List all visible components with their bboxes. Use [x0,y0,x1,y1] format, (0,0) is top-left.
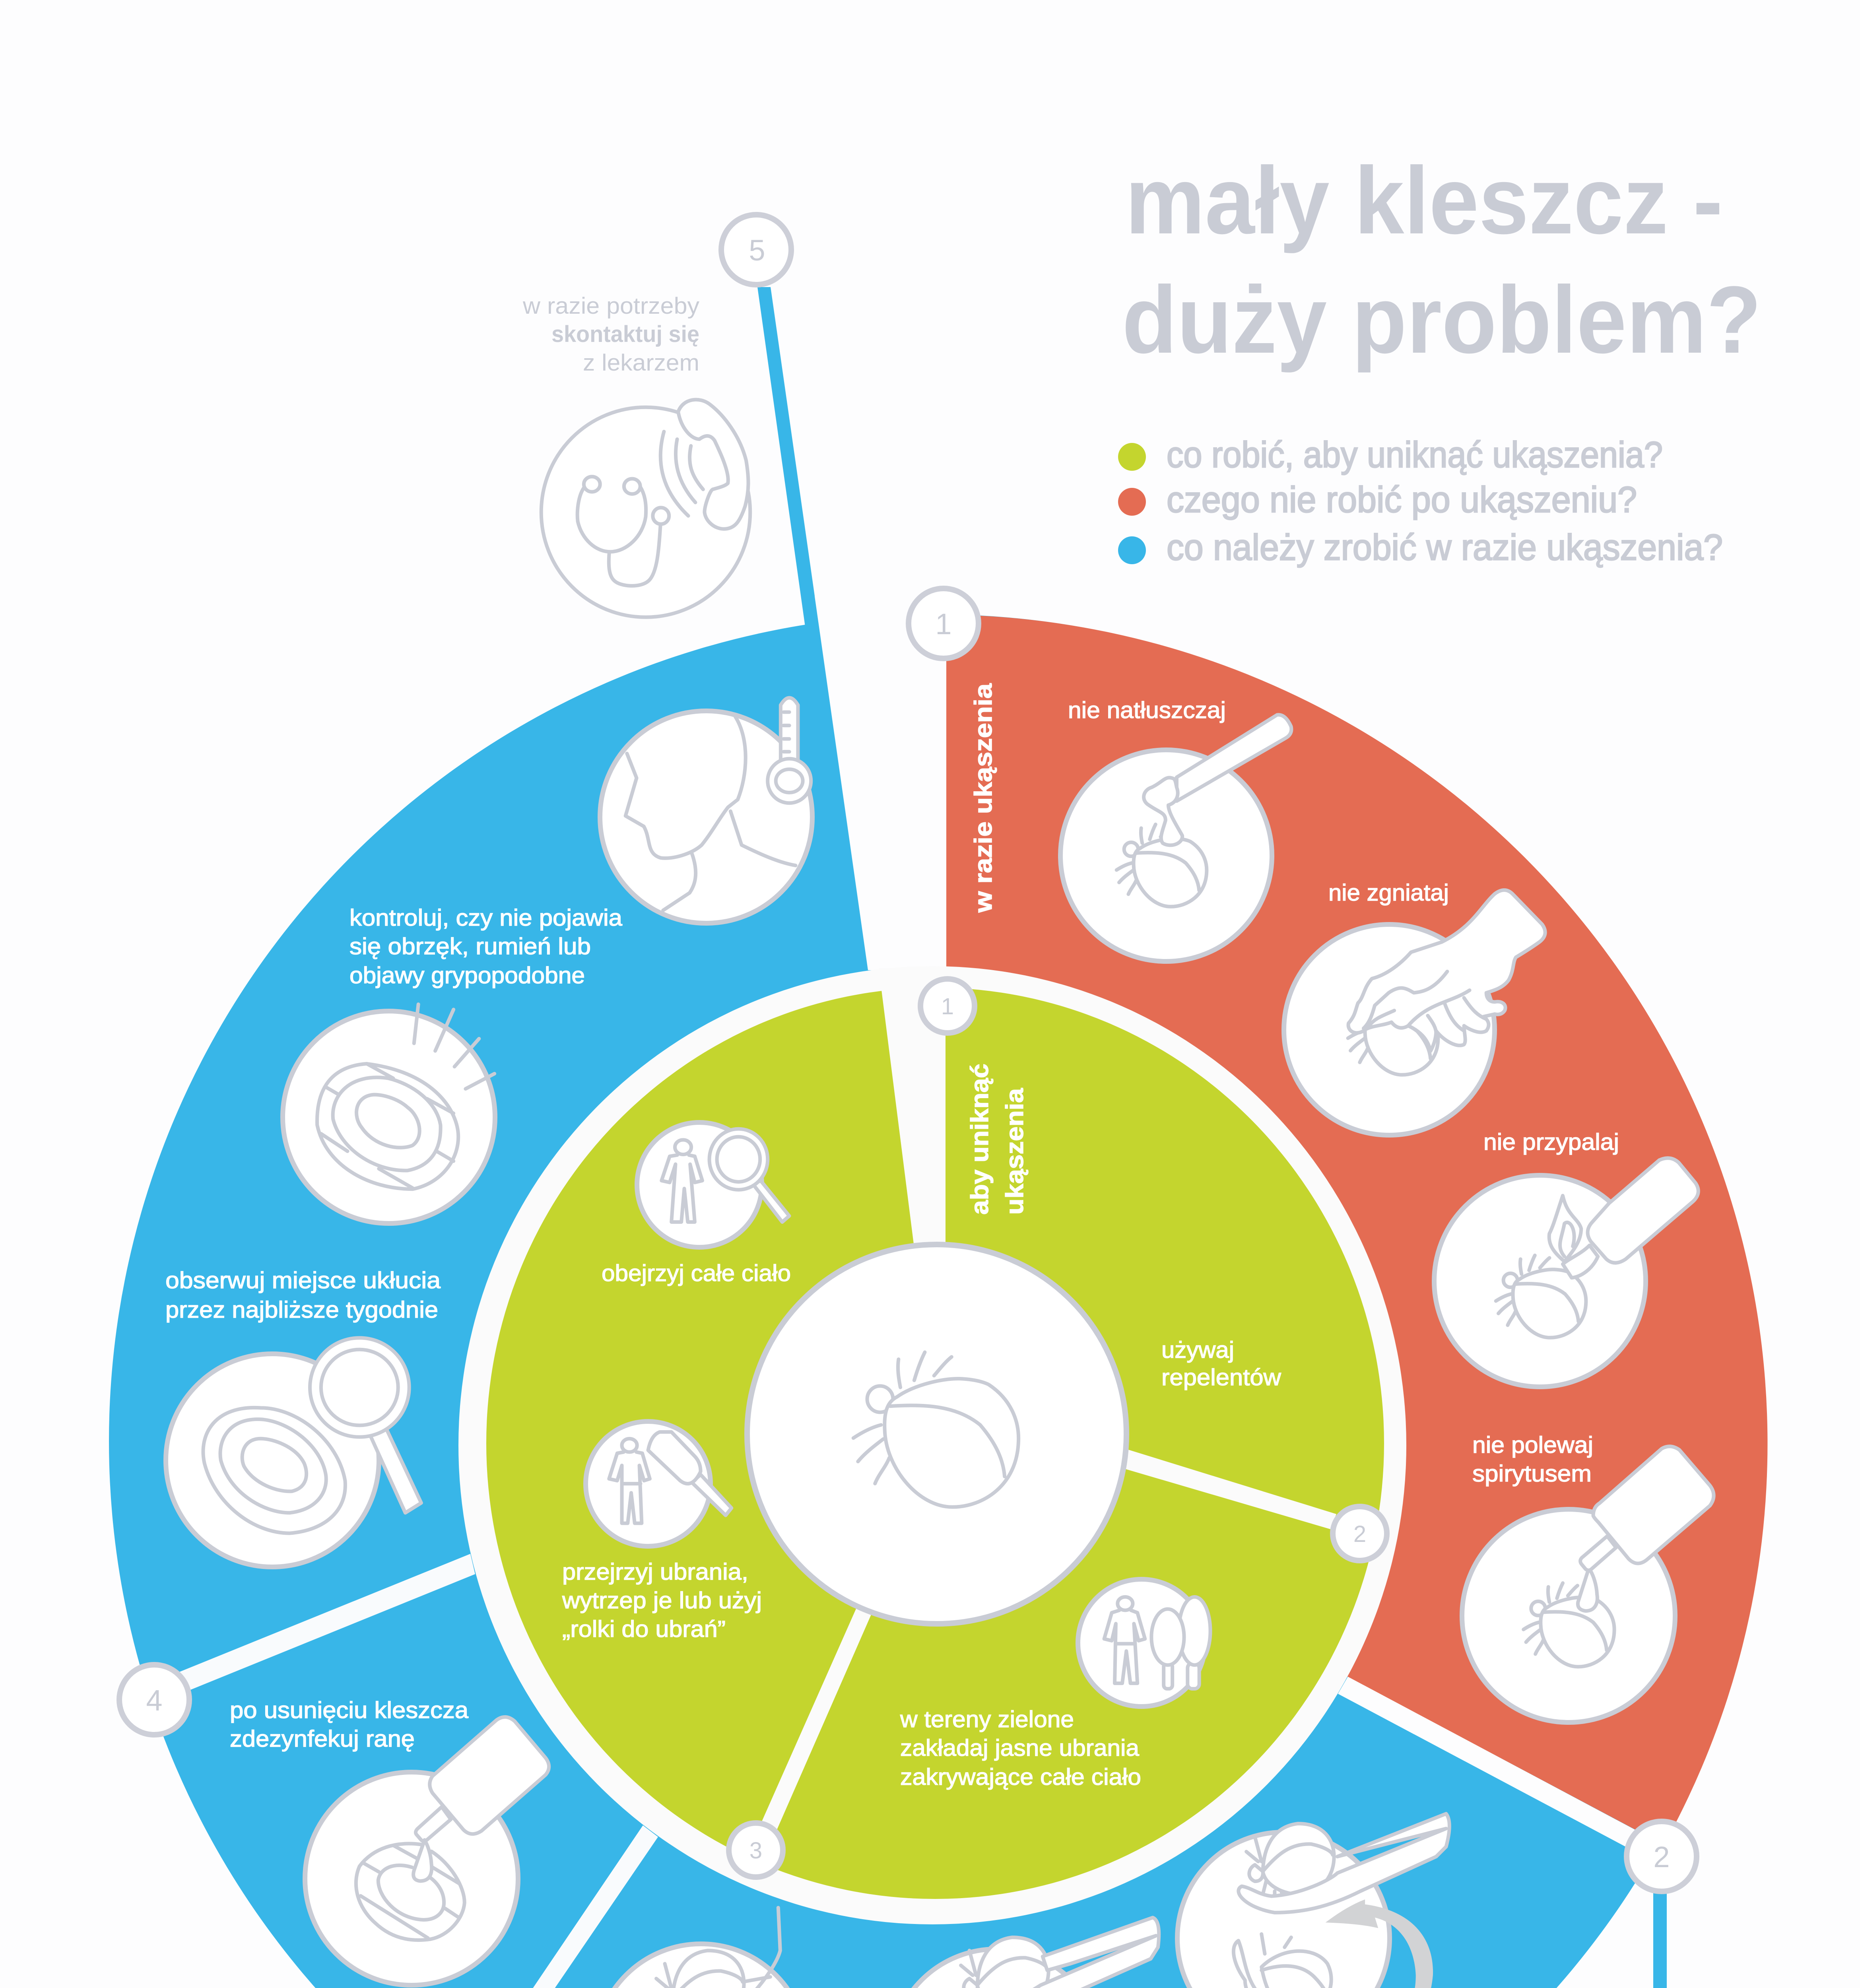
label: nie natłuszczaj: nie natłuszczaj [1068,697,1226,723]
text: doctor: skontaktuj się [551,321,699,347]
icon: obejrzyj całe ciało [637,1122,789,1247]
label: nie zgniataj: nie zgniataj [1328,880,1449,906]
label: kontroluj: objawy grypopodobne [349,963,585,988]
label: kontroluj [349,905,623,988]
divider: green steps 2 and 3 [762,1604,874,1831]
divider: green steps 1 and 2 [1118,1447,1336,1529]
gap: top notch of green disc [879,968,946,1256]
label: używaj repelentów [1161,1337,1281,1390]
label: kontroluj: się obrzęk, rumień lub [349,934,591,959]
icon: lasso [595,1908,845,1988]
node 5: 5 [749,234,765,267]
heading: w razie ukąszenia: w razie ukąszenia [970,683,997,913]
legend: co należy zrobić w razie ukąszenia? [1167,527,1723,568]
icon: jasne ubrania [1078,1579,1210,1706]
icon: przejrzyj ubrania [586,1421,732,1546]
node green 1: 1 [941,994,954,1019]
connector to step 5 [757,287,820,632]
heading: aby uniknąć ukąszenia: aby uniknąć [966,1064,994,1215]
legend: czego nie robić po ukąszeniu? [1167,480,1637,520]
icon: obserwuj [166,1338,421,1567]
label: używaj repelentów: używaj [1161,1337,1234,1363]
title [1122,147,1761,373]
label: po usunięciu [230,1697,469,1752]
icon: nie przypalaj [1434,1158,1698,1387]
node green 3: 3 [749,1838,762,1864]
icon: central tick [853,1352,1019,1507]
heading: aby uniknąć ukąszenia: ukąszenia [1001,1088,1029,1215]
panel: outer blue disc [109,614,1763,1988]
label: nie polewaj spirytusem [1472,1432,1593,1487]
label: jasne ubrania: zakrywające całe ciało [900,1764,1141,1790]
label: nie polewaj spirytusem: spirytusem [1472,1461,1592,1487]
node red 2: 2 [1653,1840,1670,1873]
icon: pęseta [891,1918,1159,1988]
label: kontroluj: kontroluj, czy nie pojawia [349,905,623,931]
node green 2: 2 [1353,1521,1366,1547]
label: jasne ubrania: zakładaj jasne ubrania [900,1735,1140,1761]
label: obejrzyj całe ciało: obejrzyj całe ciało [602,1260,791,1286]
icon: dezynfekcja [305,1717,549,1985]
gap: top notch of outer ring [815,596,946,970]
white ring [458,966,1406,1924]
label: obserwuj [165,1268,441,1323]
label: przejrzyj ubrania [562,1559,762,1642]
label: przejrzyj ubrania: wytrzep je lub użyj [562,1588,762,1613]
label: nie przypalaj: nie przypalaj [1483,1129,1619,1155]
label: obserwuj: przez najbliższe tygodnie [165,1297,438,1323]
icon: nie polewaj spirytusem [1462,1446,1714,1722]
label: używaj repelentów: repelentów [1161,1365,1281,1390]
connector to exclamation [1653,1885,1667,1988]
label: obserwuj: obserwuj miejsce ukłucia [165,1268,441,1293]
panel: central tick disc [747,1244,1126,1624]
node green 3 [729,1823,783,1877]
legend: co robić, aby uniknąć ukąszenia? [1167,435,1663,475]
icon: nie zgniataj [1284,890,1545,1135]
icon: doctor [541,400,750,617]
node red 1 [909,588,979,658]
node blue 4: 4 [146,1684,163,1717]
legend [1118,435,1723,568]
divider: blue steps 4 and 5 [160,1554,475,1699]
label: po usunięciu: zdezynfekuj ranę [230,1726,415,1752]
text: doctor: w razie potrzeby [522,293,699,319]
text: doctor [522,293,699,376]
gap: red and blue sector divider [1338,1677,1662,1858]
icon: rumień [283,1004,495,1223]
label: jasne ubrania [900,1706,1141,1790]
title: duży problem? [1122,266,1761,373]
node 5 [721,215,791,285]
text: doctor: z lekarzem [583,350,699,376]
node green 1 [920,979,975,1033]
panel: red sector [946,615,1767,1845]
panel: green disc [486,988,1384,1899]
heading: aby uniknąć ukąszenia [966,1064,1029,1215]
label: przejrzyj ubrania: „rolki do ubrań” [562,1616,726,1642]
node green 2 [1333,1507,1387,1561]
icon: fever [600,698,812,923]
label: po usunięciu: po usunięciu kleszcza [230,1697,469,1723]
divider: blue steps 3 and 4 [464,1825,658,1988]
node red 1: 1 [935,608,952,641]
icon: kleszczołapki [1177,1814,1449,1988]
label: nie polewaj spirytusem: nie polewaj [1472,1432,1593,1458]
title: mały kleszcz - [1125,147,1723,254]
icon: nie natłuszczaj [1060,715,1291,961]
node red 2 [1627,1821,1697,1891]
node blue 4 [119,1665,189,1735]
label: przejrzyj ubrania: przejrzyj ubrania, [562,1559,748,1585]
label: jasne ubrania: w tereny zielone [900,1706,1074,1732]
